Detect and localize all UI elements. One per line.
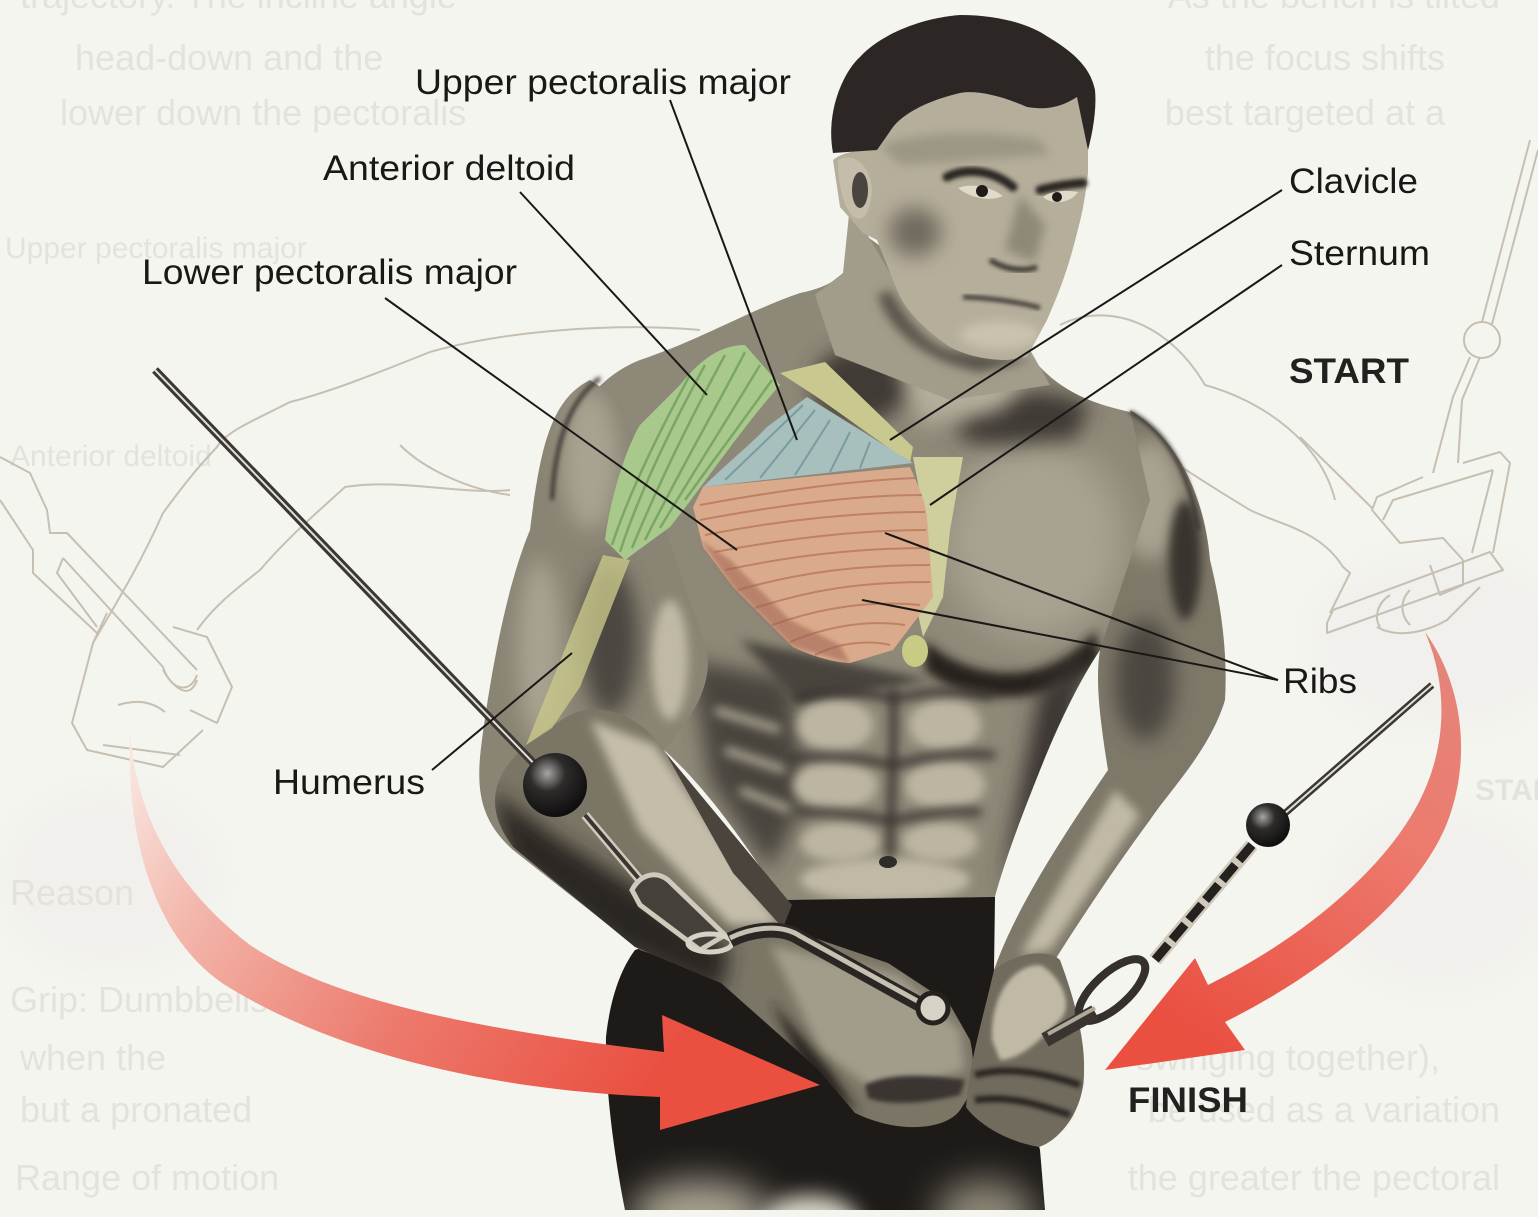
forehead shadow [880, 133, 1050, 165]
abs lower right [902, 822, 978, 862]
cable wire [1275, 685, 1432, 822]
figure outline accents [552, 378, 1198, 530]
label: upper pectoralis major: Upper pectoralis major [415, 63, 791, 102]
leader: upper pectoralis [670, 100, 797, 440]
show-through text from the reverse of the page: but a pronated [20, 1089, 252, 1130]
show-through text from the reverse of the page: Grip: Dumbbells [10, 979, 268, 1020]
show-through text from the reverse of the page: the focus shifts [1205, 37, 1445, 78]
abs upper right [909, 699, 981, 751]
figure: bodybuilder [479, 15, 1252, 1217]
cable highlight [1275, 685, 1432, 822]
ear [838, 158, 872, 219]
leader: sternum [930, 265, 1282, 505]
leader: humerus [432, 653, 572, 770]
shoulder light [1118, 440, 1182, 560]
neck shadow [878, 290, 1030, 372]
right hand [966, 953, 1084, 1147]
abs lower left [800, 822, 880, 862]
ghost arm left [93, 327, 700, 643]
show-through text from the reverse of the page: head-down and the [75, 37, 383, 78]
humerus [526, 555, 630, 745]
leader: anterior deltoid [520, 192, 707, 395]
right arm shading [1020, 440, 1201, 955]
upper pectoralis major [703, 397, 913, 487]
label: humerus: Humerus [273, 763, 425, 802]
label: ribs: Ribs [1283, 662, 1357, 701]
lower pectoralis fibres [700, 478, 930, 655]
chin highlight [960, 321, 1040, 349]
cable left [155, 370, 587, 817]
right side shadow [1000, 650, 1090, 890]
ghost arm right [1060, 315, 1372, 613]
cheek shadow [889, 208, 941, 256]
deltoid fibres [612, 352, 772, 552]
left arm shading [518, 390, 688, 740]
triceps shadow [582, 565, 638, 715]
anterior deltoid [605, 345, 780, 560]
handle left [730, 930, 930, 1010]
shadow between forearm and torso [655, 740, 792, 935]
ear inner [852, 172, 868, 208]
show-through text from the reverse of the page: Reason [10, 872, 134, 913]
show-through text from the reverse of the page: lower down the pectoralis [60, 92, 466, 133]
muscle overlays [526, 345, 963, 745]
right fingers [975, 1071, 1080, 1115]
chain links left [585, 815, 640, 880]
upper pectoralis fibres [725, 405, 870, 480]
pectoral crease [925, 630, 1100, 697]
leader: ribs upper [885, 533, 1278, 680]
nose shadow [1005, 195, 1045, 262]
arrow: right sweep [1105, 632, 1461, 1070]
arrow: left sweep [129, 722, 820, 1130]
ferrule right [1045, 1012, 1095, 1040]
ferrule highlight [1048, 1008, 1095, 1034]
leader: lower pectoralis [385, 298, 737, 550]
face shading [838, 133, 1050, 349]
right thumb [992, 965, 1066, 1060]
ghost handle left [0, 457, 197, 687]
chain links right [1155, 845, 1252, 960]
hand lower edge [770, 1000, 860, 1115]
biceps light [652, 600, 688, 720]
lower belly light [800, 858, 970, 902]
serratus shadow [690, 660, 805, 870]
shoulder highlight [562, 390, 618, 530]
upper arm shadow [1115, 620, 1175, 740]
left forearm shading [490, 720, 965, 1115]
serratus light strips [715, 710, 790, 810]
mouth [963, 297, 1040, 308]
show-through text from the reverse of the page: the greater the pectoral [1128, 1157, 1500, 1198]
left pupil [976, 185, 988, 197]
left upper arm [479, 380, 720, 970]
left eye [958, 186, 1003, 199]
hand knuckle crease [865, 1076, 965, 1103]
abs middle left [793, 760, 877, 810]
clavicle [780, 362, 913, 463]
ghost handle right [1327, 452, 1510, 633]
hand back [770, 945, 965, 1095]
chain left [585, 815, 732, 952]
forearm dark band [490, 790, 730, 995]
show-through text from the reverse of the page: Upper pectoralis major [5, 232, 307, 265]
lower pectoralis major [693, 467, 933, 663]
label: start: START [1289, 352, 1409, 391]
triceps shadow [1169, 500, 1201, 620]
label: finish: FINISH [1128, 1081, 1248, 1120]
head [833, 83, 1088, 360]
cable ball [1246, 803, 1290, 847]
abs upper left [797, 699, 873, 751]
label: lower pectoralis major: Lower pectoralis major [142, 253, 517, 292]
label: anterior deltoid: Anterior deltoid [323, 149, 575, 188]
leg highlights [630, 1180, 1035, 1217]
show-through text from the reverse of the page: best targeted at a [1165, 92, 1446, 133]
large link right [1069, 949, 1155, 1031]
cable right [1246, 685, 1432, 847]
large link left [632, 875, 725, 950]
ghost hand left [72, 613, 232, 767]
right eye [1043, 191, 1078, 202]
leader: clavicle [890, 190, 1282, 440]
show-through text from the reverse of the page: be used as a variation [1148, 1089, 1500, 1130]
label: sternum: Sternum [1289, 234, 1430, 273]
right pupil [1052, 192, 1062, 202]
abdominal blocks [793, 699, 985, 862]
upper chest light [892, 378, 1031, 430]
torso [560, 235, 1196, 903]
abdominal lines [790, 690, 992, 855]
ghost cable right [1433, 140, 1538, 473]
pectoral lower edge shading [700, 540, 850, 663]
forearm light band [590, 720, 780, 925]
sternum and cartilage [913, 457, 963, 637]
show-through shadows from the reverse page [0, 550, 1538, 990]
collar shadow right [960, 392, 1090, 444]
handle highlight left [730, 928, 930, 1008]
ghost pulley right [1464, 322, 1500, 358]
hair [831, 15, 1095, 153]
ghost hand right [1377, 560, 1480, 633]
navel [879, 856, 897, 868]
leader: ribs lower [862, 600, 1278, 680]
ghost start-position arms [0, 140, 1538, 767]
shorts [606, 897, 1045, 1210]
handle end left [918, 993, 948, 1023]
right pectoral light [945, 440, 1125, 640]
cable ball [523, 753, 587, 817]
arm edge [518, 560, 562, 740]
label: clavicle: Clavicle [1289, 162, 1418, 201]
leader lines [385, 100, 1282, 770]
left forearm and hand [495, 709, 973, 1127]
abs middle right [905, 760, 985, 810]
xiphoid [902, 635, 928, 667]
neck base shadow [812, 347, 908, 423]
neck [815, 205, 1050, 400]
small link left [688, 934, 732, 952]
nose [990, 260, 1037, 270]
right upper arm and forearm [994, 410, 1226, 970]
torso shading [690, 347, 1125, 902]
under pec band [740, 640, 930, 705]
forearm light [1020, 790, 1140, 955]
cable wire [155, 370, 545, 775]
show-through text from the reverse of the page: swinging together), [1136, 1037, 1440, 1078]
show-through text from the reverse of the page: Anterior deltoid [10, 440, 212, 473]
show-through text from the reverse of the page: when the [19, 1037, 166, 1078]
brows [947, 171, 1083, 190]
chain right [1045, 845, 1252, 1040]
show-through text from the reverse of the page: Range of motion [15, 1157, 279, 1198]
cable highlight [155, 370, 545, 775]
